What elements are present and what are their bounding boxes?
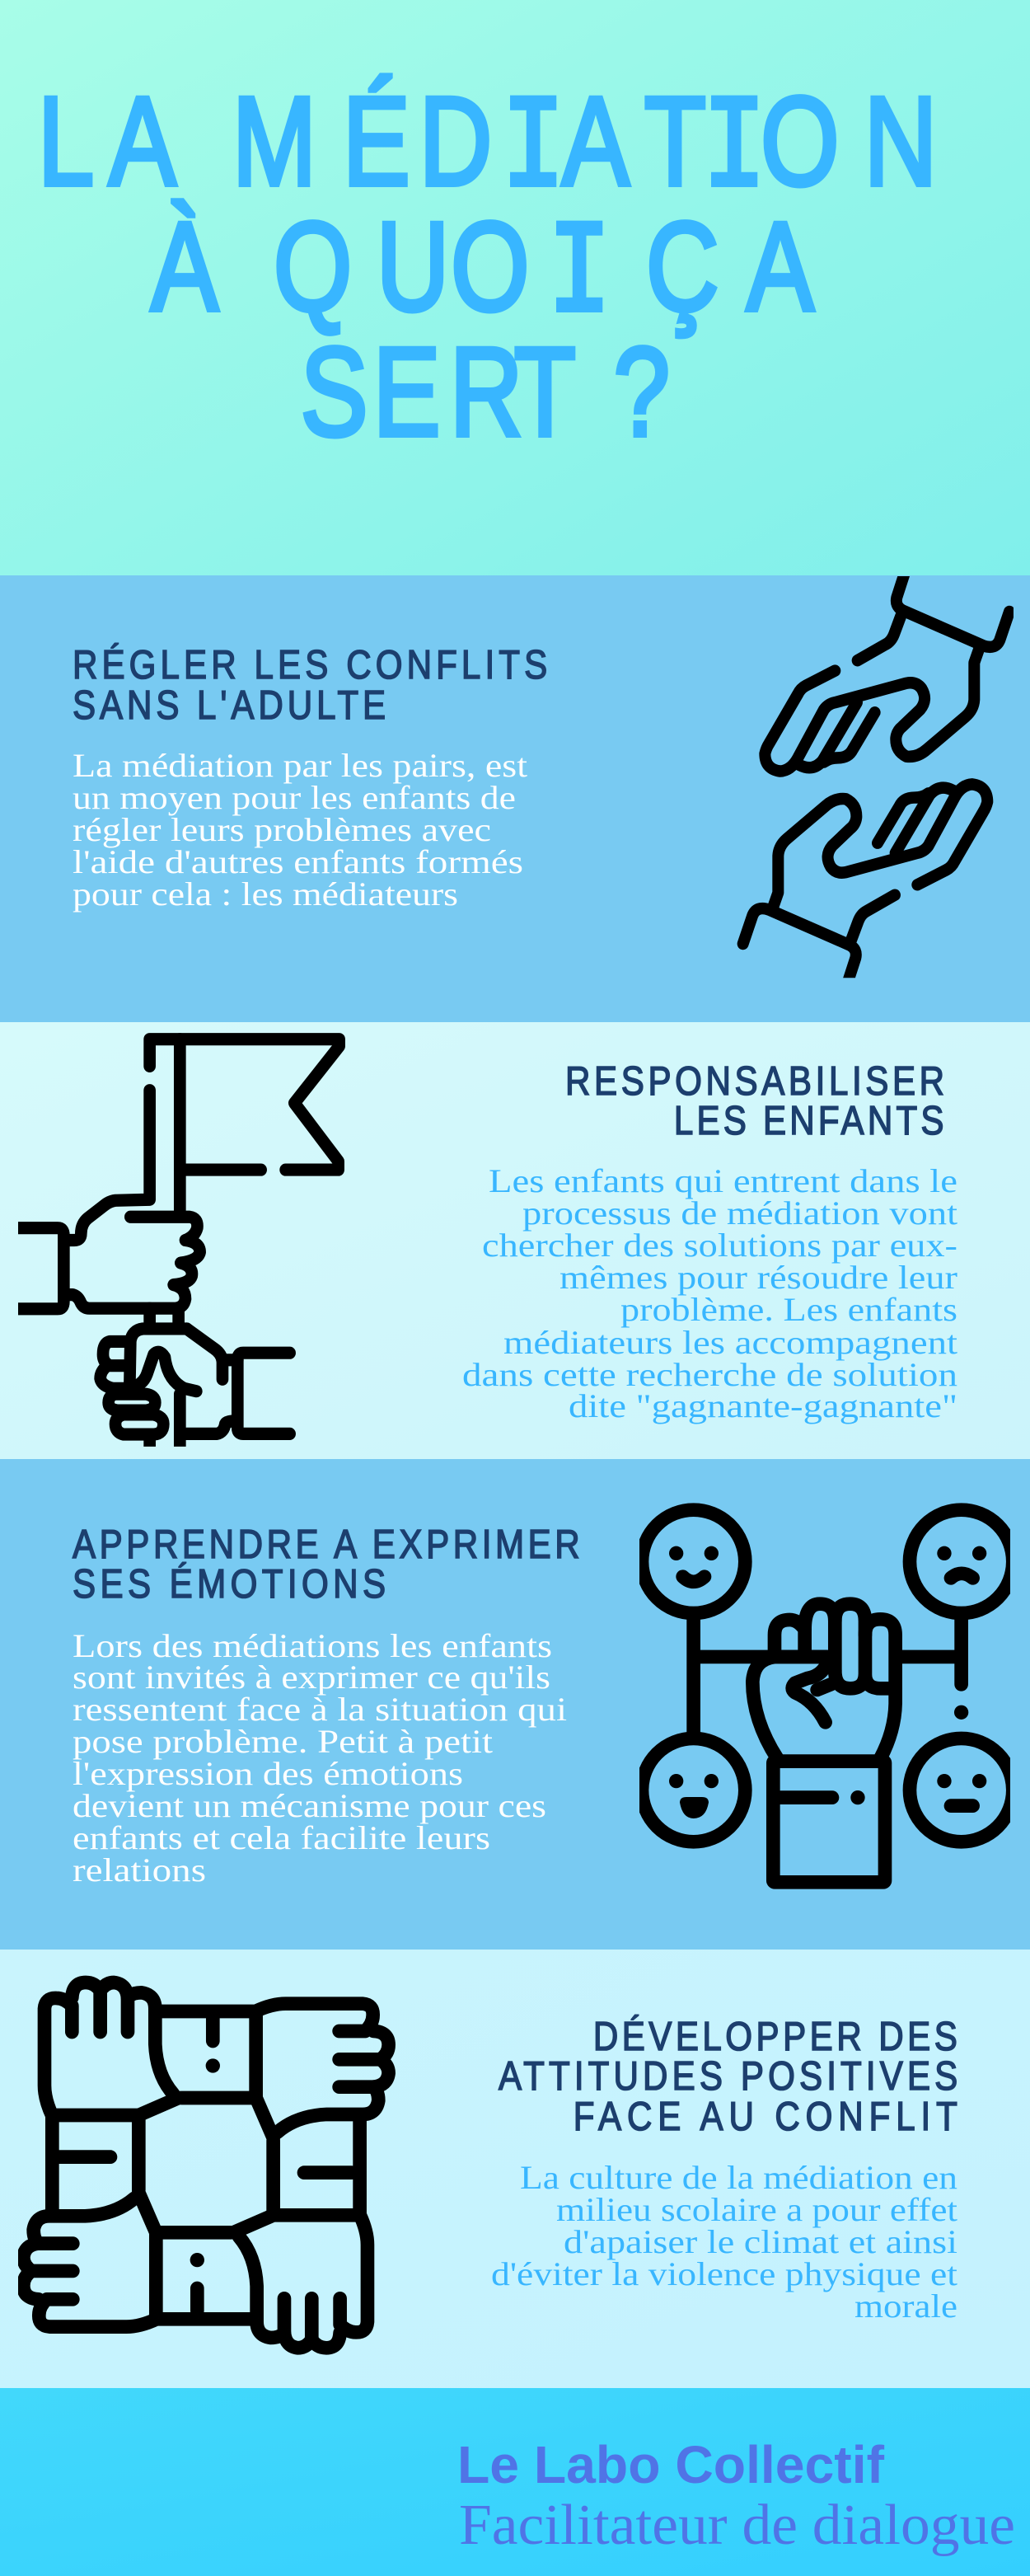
footer: organisation name: Le Labo Collectif bbox=[457, 2435, 885, 2494]
heading: régler les conflits: SANS L'ADULTE bbox=[73, 683, 386, 728]
text block: régler les conflits: La médiation par les pairs, est bbox=[73, 747, 527, 784]
heading: exprimer ses émotions: APPRENDRE A EXPRIMER bbox=[73, 1522, 580, 1567]
title: QUO bbox=[274, 197, 529, 337]
text block: régler les conflits: un moyen pour les enfants de bbox=[73, 779, 516, 816]
text block: exprimer ses émotions: pose problème. Petit à petit bbox=[73, 1723, 493, 1760]
text block: responsabiliser: dite "gagnante-gagnante" bbox=[569, 1387, 957, 1424]
text block: attitudes positives: La culture de la médiation en bbox=[520, 2159, 957, 2196]
panel: footer bbox=[0, 2388, 1030, 2576]
title: SERT bbox=[301, 322, 576, 462]
title bbox=[38, 72, 937, 462]
title: LA bbox=[38, 72, 176, 212]
panel: apprendre à exprimer ses émotions bbox=[72, 1503, 1010, 1889]
heading: attitudes positives bbox=[499, 2014, 957, 2139]
heading: attitudes positives: ATTITUDES POSITIVES bbox=[499, 2053, 957, 2099]
heading: exprimer ses émotions bbox=[73, 1522, 580, 1607]
icon: raised fist with four emotion faces bbox=[642, 1510, 1013, 1882]
text block: attitudes positives: d'éviter la violence physique et bbox=[491, 2255, 957, 2292]
text block: attitudes positives bbox=[491, 2159, 957, 2325]
icon: two open hands bbox=[743, 572, 1009, 983]
text block: responsabiliser: problème. Les enfants bbox=[620, 1291, 957, 1328]
heading: attitudes positives: DÉVELOPPER DES bbox=[593, 2014, 957, 2059]
text block: responsabiliser: mêmes pour résoudre leur bbox=[559, 1259, 957, 1296]
heading: attitudes positives: FACE AU CONFLIT bbox=[574, 2094, 957, 2139]
title: MÉD bbox=[232, 72, 492, 212]
title: I bbox=[703, 74, 766, 225]
title: I bbox=[502, 74, 565, 225]
title: ? bbox=[614, 322, 670, 462]
text block: exprimer ses émotions: relations bbox=[73, 1851, 206, 1889]
text block: exprimer ses émotions: enfants et cela facilite leurs bbox=[73, 1819, 490, 1856]
heading: responsabiliser: RESPONSABILISER bbox=[565, 1058, 944, 1104]
text block: exprimer ses émotions: devient un mécanisme pour ces bbox=[73, 1787, 546, 1824]
text block: attitudes positives: milieu scolaire a pour effet bbox=[556, 2191, 957, 2228]
text block: responsabiliser: médiateurs les accompagnent bbox=[503, 1324, 957, 1361]
text block: régler les conflits: régler leurs problèmes avec bbox=[73, 811, 491, 848]
text block: exprimer ses émotions: Lors des médiations les enfants bbox=[73, 1627, 552, 1664]
text block: responsabiliser: chercher des solutions par eux- bbox=[482, 1227, 957, 1264]
title: I bbox=[548, 199, 611, 350]
text block: responsabiliser: Les enfants qui entrent dans le bbox=[489, 1162, 957, 1199]
heading: responsabiliser bbox=[565, 1058, 944, 1143]
text block: exprimer ses émotions: ressentent face à la situation qui bbox=[73, 1691, 567, 1728]
text block: régler les conflits: l'aide d'autres enfants formés bbox=[73, 843, 523, 880]
panel: responsabiliser les enfants bbox=[0, 1022, 1030, 1459]
text block: attitudes positives: morale bbox=[854, 2287, 957, 2325]
text block: exprimer ses émotions bbox=[73, 1627, 567, 1889]
title: À bbox=[151, 197, 218, 337]
title: AT bbox=[562, 72, 706, 212]
text block: régler les conflits bbox=[73, 747, 527, 913]
text block: exprimer ses émotions: l'expression des émotions bbox=[73, 1755, 463, 1792]
text block: responsabiliser: dans cette recherche de solution bbox=[462, 1356, 957, 1393]
text block: exprimer ses émotions: sont invités à exprimer ce qu'ils bbox=[73, 1659, 550, 1696]
text block: responsabiliser bbox=[462, 1162, 957, 1424]
panel: régler les conflits bbox=[73, 576, 1014, 978]
text block: attitudes positives: d'apaiser le climat et ainsi bbox=[564, 2223, 957, 2260]
heading: exprimer ses émotions: SES ÉMOTIONS bbox=[73, 1561, 386, 1607]
title: ON bbox=[761, 72, 937, 212]
icon: four interlocked hands bbox=[23, 1982, 389, 2348]
icon: flag held by two hands bbox=[11, 1039, 339, 1453]
text block: régler les conflits: pour cela : les médiateurs bbox=[73, 875, 458, 913]
heading: responsabiliser: LES ENFANTS bbox=[674, 1098, 944, 1143]
text block: responsabiliser: processus de médiation vont bbox=[522, 1194, 957, 1232]
panel: attitudes positives bbox=[0, 1950, 1030, 2388]
panel: title background bbox=[0, 0, 1030, 575]
heading: régler les conflits: RÉGLER LES CONFLITS bbox=[73, 642, 547, 687]
footer: tagline: Facilitateur de dialogue bbox=[459, 2494, 1015, 2557]
heading: régler les conflits bbox=[73, 642, 547, 728]
title: ÇA bbox=[646, 197, 814, 337]
